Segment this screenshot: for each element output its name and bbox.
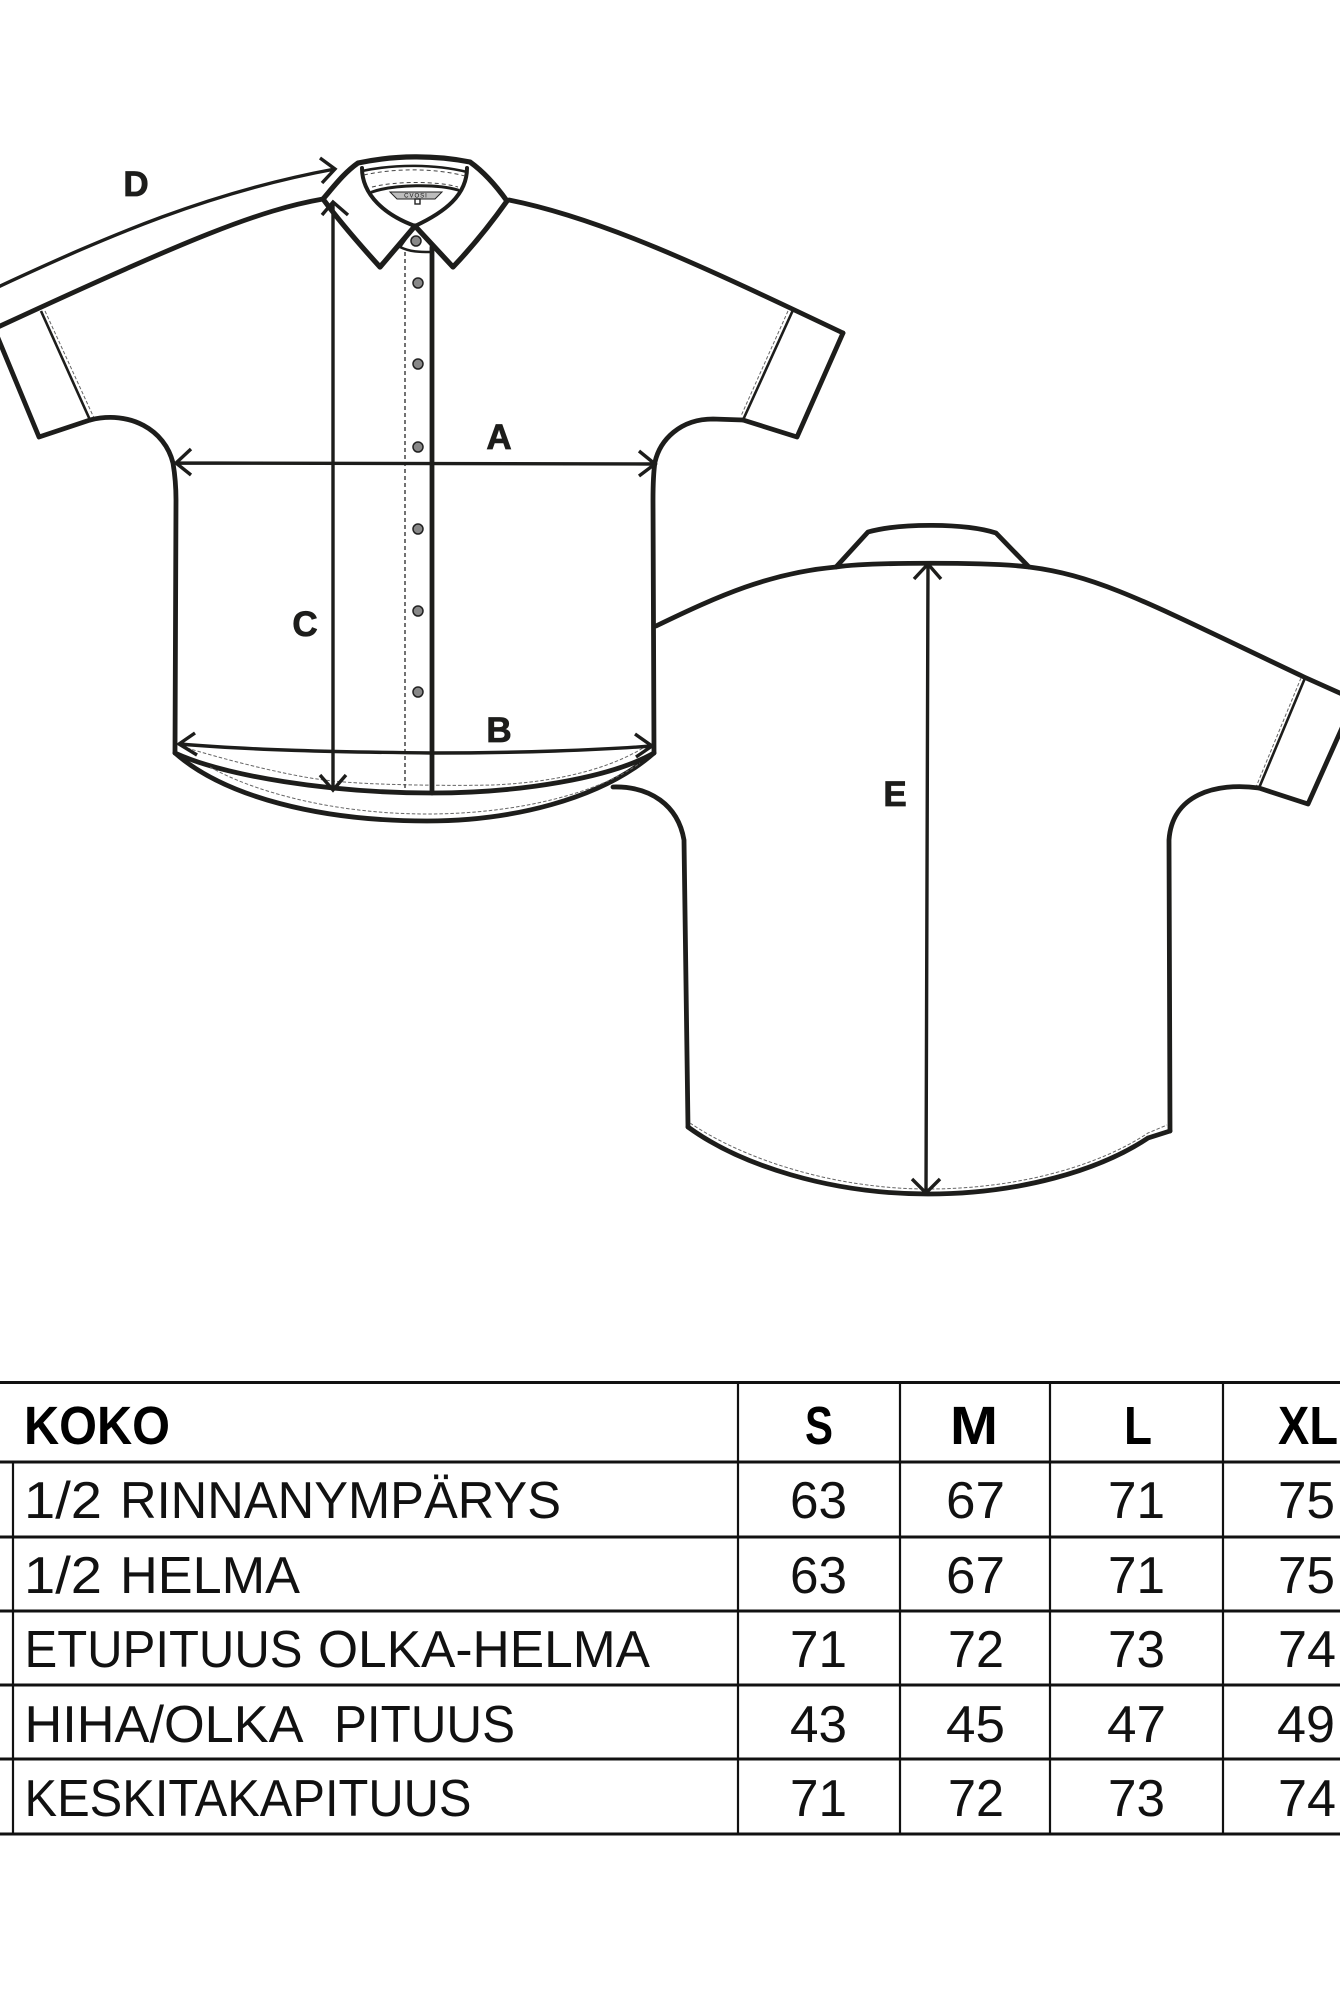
placket edge <box>430 248 434 793</box>
left underarm and side seam <box>90 417 176 753</box>
table grid <box>0 1382 1340 1834</box>
header row: KOKO <box>24 1396 170 1456</box>
row: back length <box>24 1770 1336 1828</box>
row: front length <box>24 1621 1336 1679</box>
buttons <box>411 236 423 697</box>
row: sleeve length: 49 <box>1277 1696 1335 1754</box>
back hem stitching <box>690 1123 1167 1189</box>
row: sleeve length: 47 <box>1107 1696 1166 1754</box>
row: back length: 73 <box>1108 1770 1165 1828</box>
arrow C: front length <box>320 202 348 790</box>
row: sleeve length: 43 <box>790 1696 847 1754</box>
label B: B <box>486 711 512 750</box>
header row: L <box>1124 1396 1152 1456</box>
row: back length: 74 <box>1278 1770 1336 1828</box>
row: front length: 71 <box>790 1621 847 1679</box>
label E: E <box>883 775 907 814</box>
back shoulder and sleeve line <box>656 563 1340 694</box>
row: chest: 71 <box>1108 1472 1165 1530</box>
back left side seam <box>613 787 688 1127</box>
neck opening <box>362 168 467 226</box>
row: hem: HELMA <box>120 1547 300 1605</box>
row: front length: 72 <box>948 1621 1004 1679</box>
row: back length: 72 <box>948 1770 1004 1828</box>
row: hem: 63 <box>790 1547 847 1605</box>
outer curved hem <box>175 753 654 821</box>
inner neck back line <box>362 166 467 172</box>
row: front length: OLKA-HELMA <box>318 1621 650 1679</box>
right cuff <box>741 310 843 437</box>
hem stitching <box>187 748 643 814</box>
arrow E: back length <box>912 564 941 1193</box>
row: chest <box>24 1472 1335 1530</box>
row: sleeve length <box>24 1696 1335 1754</box>
row: sleeve length: 45 <box>946 1696 1005 1754</box>
arrow A: chest width <box>176 449 655 476</box>
row: hem: 75 <box>1278 1547 1335 1605</box>
front view of shirt <box>0 157 843 821</box>
back right cuff <box>1256 678 1340 804</box>
collar label <box>390 192 442 204</box>
row: hem: 67 <box>946 1547 1005 1605</box>
back right side seam <box>1169 787 1259 1131</box>
back collar <box>836 525 1029 567</box>
left cuff <box>0 311 94 437</box>
row: hem: 1/2 <box>24 1547 102 1605</box>
label C: C <box>292 605 318 644</box>
row: front length: ETUPITUUS <box>24 1621 302 1679</box>
row: back length: KESKITAKAPITUUS <box>24 1770 472 1828</box>
header row <box>24 1396 1338 1456</box>
row: front length: 74 <box>1278 1621 1336 1679</box>
back hem <box>688 1127 1170 1194</box>
collar outer <box>323 157 507 267</box>
row: hem <box>24 1547 1335 1605</box>
collar label: CVOSI <box>404 194 428 200</box>
row: chest: RINNANYMPÄRYS <box>120 1472 561 1530</box>
placket top <box>400 226 431 252</box>
right shoulder and sleeve line <box>509 200 843 333</box>
row: hem: 71 <box>1108 1547 1165 1605</box>
arrow B: hem width <box>179 733 652 757</box>
front body fill and side seams <box>0 199 843 821</box>
label D: D <box>123 165 149 204</box>
row: sleeve length: HIHA/OLKA <box>24 1696 304 1754</box>
row: chest: 1/2 <box>24 1472 102 1530</box>
row: chest: 63 <box>790 1472 847 1530</box>
size table <box>0 1382 1340 1834</box>
row: chest: 75 <box>1278 1472 1335 1530</box>
row: back length: 71 <box>790 1770 847 1828</box>
row: sleeve length: PITUUS <box>334 1696 515 1754</box>
row: chest: 67 <box>946 1472 1005 1530</box>
arrow D: sleeve length <box>0 158 335 287</box>
row: front length: 73 <box>1108 1621 1165 1679</box>
back view of shirt <box>613 525 1340 1194</box>
left shoulder and sleeve line <box>0 199 323 327</box>
header row: M <box>950 1396 998 1456</box>
label A: A <box>486 418 512 457</box>
header row: S <box>805 1396 833 1456</box>
right underarm and side seam <box>653 419 743 753</box>
placket stitching <box>404 252 406 788</box>
inner hem <box>175 753 654 793</box>
